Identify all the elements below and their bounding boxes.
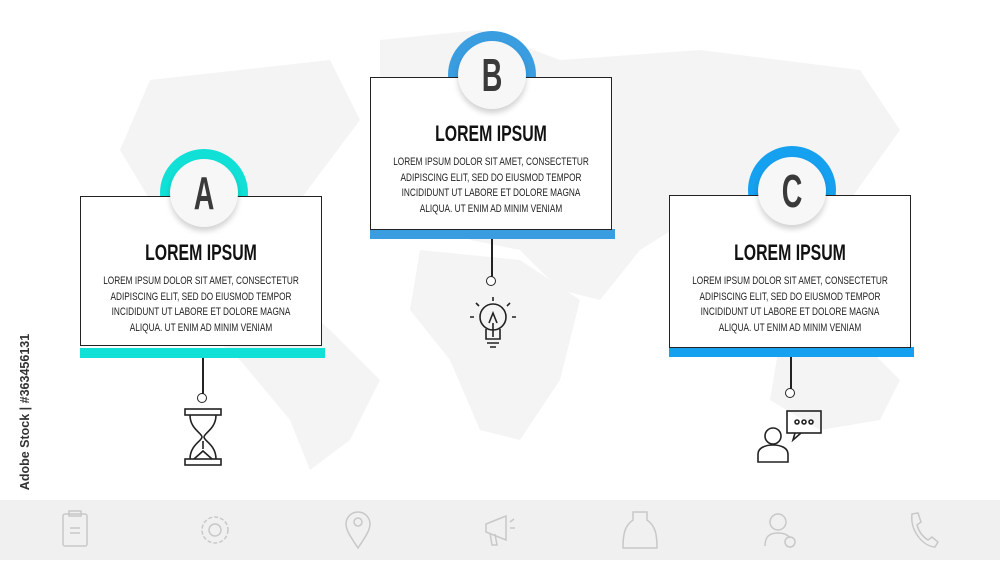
text C: INCIDIDUNT UT LABORE ET DOLORE MAGNA: [701, 306, 879, 318]
icon: pin: [346, 512, 370, 548]
panel B: [370, 31, 615, 348]
icon: gear: [202, 517, 228, 543]
heading A: LOREM IPSUM: [145, 240, 257, 265]
text C: LOREM IPSUM DOLOR SIT AMET, CONSECTETUR: [692, 275, 888, 287]
icon: clipboard: [63, 511, 87, 546]
panel C: C: [782, 165, 802, 217]
heading B: LOREM IPSUM: [435, 121, 547, 146]
watermark text: Adobe Stock | #363456131: [18, 334, 32, 490]
icon: hourglass: [184, 408, 222, 466]
footer icon bar: [0, 500, 1000, 560]
text A: ADIPISCING ELIT, SED DO EIUSMOD TEMPOR: [111, 290, 291, 302]
text B: ALIQUA. UT ENIM AD MINIM VENIAM: [420, 202, 562, 214]
text B: [393, 156, 589, 214]
text A: ALIQUA. UT ENIM AD MINIM VENIAM: [130, 322, 272, 334]
text B: LOREM IPSUM DOLOR SIT AMET, CONSECTETUR: [393, 156, 589, 168]
text A: [103, 275, 299, 334]
text C: ADIPISCING ELIT, SED DO EIUSMOD TEMPOR: [700, 290, 880, 302]
text C: [692, 275, 888, 334]
icon: phone: [912, 513, 938, 547]
icon: bag: [623, 512, 657, 548]
heading C: LOREM IPSUM: [734, 240, 846, 265]
icon: light bulb: [470, 297, 516, 348]
panel B: B: [482, 49, 502, 101]
text B: INCIDIDUNT UT LABORE ET DOLORE MAGNA: [402, 187, 580, 199]
icon: megaphone: [486, 516, 515, 545]
panel A: A: [194, 167, 214, 219]
text C: ALIQUA. UT ENIM AD MINIM VENIAM: [719, 322, 861, 334]
text A: LOREM IPSUM DOLOR SIT AMET, CONSECTETUR: [103, 275, 299, 287]
panel A: [80, 149, 325, 466]
icon: person with speech bubble: [757, 410, 822, 463]
text A: INCIDIDUNT UT LABORE ET DOLORE MAGNA: [112, 306, 290, 318]
text B: ADIPISCING ELIT, SED DO EIUSMOD TEMPOR: [401, 172, 581, 184]
icon: user check: [765, 514, 795, 547]
panel C: [669, 146, 914, 463]
